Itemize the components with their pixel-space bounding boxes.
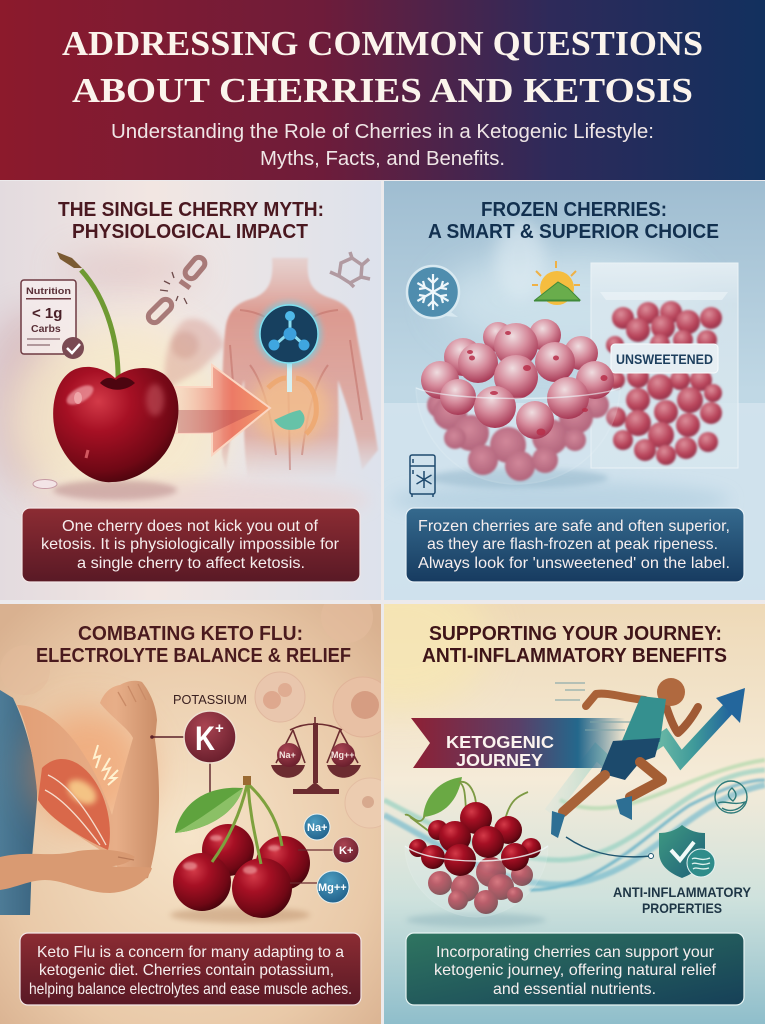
water droplet <box>33 480 57 488</box>
text box: a single cherry to affect ketosis. <box>77 555 305 572</box>
unsweetened label: UNSWEETENED <box>616 351 713 367</box>
icon: balance scale: Mg++ <box>331 750 355 760</box>
ketogenic journey banner: JOURNEY <box>456 750 543 770</box>
K+ badge: K <box>195 720 215 758</box>
arrow: cherry to body <box>175 365 270 455</box>
text box: ketogenic journey, offering natural relief <box>434 962 717 979</box>
icon: nutrition card: Carbs <box>31 323 61 335</box>
potassium callout <box>150 693 247 793</box>
title <box>62 24 703 110</box>
text box <box>406 933 744 1005</box>
text box: and essential nutrients. <box>493 981 656 998</box>
text box <box>406 508 744 582</box>
heading <box>422 623 727 667</box>
heading: ELECTROLYTE BALANCE & RELIEF <box>36 645 351 667</box>
subtitle <box>111 121 654 170</box>
top cherries <box>421 319 614 439</box>
icon: sun and mountain <box>532 261 580 305</box>
text box: ketosis. It is physiologically impossible for <box>41 536 340 553</box>
text box: Always look for 'unsweetened' on the label. <box>418 555 730 572</box>
text box: helping balance electrolytes and ease muscle aches. <box>29 981 352 998</box>
icon: snowflake badge <box>407 266 459 318</box>
Na+ ion: Na+ <box>307 822 328 834</box>
text box: Frozen cherries are safe and often superior, <box>418 518 730 535</box>
connector line <box>566 837 654 858</box>
icon: broken chain <box>146 255 207 325</box>
icon: balance scale: Na+ <box>279 750 296 760</box>
human body with muscles <box>222 258 378 480</box>
heading: THE SINGLE CHERRY MYTH: <box>58 199 324 221</box>
text box: as they are flash-frozen at peak ripeness. <box>427 536 718 553</box>
panel: frozen cherries <box>384 181 765 600</box>
panel: keto flu <box>0 591 395 1024</box>
heading <box>37 626 350 662</box>
anti-inflammatory label <box>613 884 752 916</box>
K+ ion: K+ <box>339 845 353 857</box>
leaf <box>175 788 243 833</box>
icon: nutrition card <box>21 280 84 359</box>
text box <box>22 508 360 582</box>
glowing muscle <box>38 759 110 850</box>
flowing waves <box>384 760 765 890</box>
K+ badge <box>184 711 236 763</box>
bag cherries <box>606 301 722 465</box>
title: ADDRESSING COMMON QUESTIONS <box>62 24 703 63</box>
heading: FROZEN CHERRIES: <box>481 199 667 221</box>
hand holding elbow <box>0 850 152 893</box>
subtitle: Understanding the Role of Cherries in a Ketogenic Lifestyle: <box>111 121 654 143</box>
subtitle: Myths, Facts, and Benefits. <box>260 148 505 170</box>
arrow: upward growth <box>550 688 745 813</box>
panel: supporting your journey <box>310 570 765 1024</box>
leaf <box>423 777 462 817</box>
icon: nutrition card: Nutrition <box>26 286 71 297</box>
header banner <box>0 0 765 180</box>
heading: SUPPORTING YOUR JOURNEY: <box>429 623 722 645</box>
ketogenic journey banner: KETOGENIC <box>446 732 554 752</box>
icon: shield <box>659 825 715 878</box>
heading: ANTI-INFLAMMATORY BENEFITS <box>422 645 727 667</box>
tank top <box>0 690 37 915</box>
bowl of fresh cherries <box>405 777 548 927</box>
panel: single cherry myth <box>0 181 381 600</box>
icon: freezer <box>410 455 435 497</box>
unsweetened label <box>611 344 718 373</box>
faint background body <box>164 319 225 390</box>
heading <box>428 202 718 238</box>
icon: balance scale <box>271 717 361 794</box>
large cherry <box>53 252 178 500</box>
motion lines <box>555 683 630 730</box>
icon: hexagon molecule <box>330 252 370 287</box>
heading: A SMART & SUPERIOR CHOICE <box>428 221 719 243</box>
heading <box>58 202 322 238</box>
background cells <box>0 591 395 828</box>
heading: COMBATING KETO FLU: <box>78 623 303 645</box>
icon: nutrition card: < 1g <box>32 305 62 322</box>
lower bowl cherries <box>428 857 533 914</box>
lower cherries inside bowl <box>427 392 609 481</box>
frozen cherry bag <box>591 263 738 468</box>
title: ABOUT CHERRIES AND KETOSIS <box>72 71 693 110</box>
potassium label: POTASSIUM <box>173 693 247 707</box>
running athlete <box>551 678 698 838</box>
text box: One cherry does not kick you out of <box>62 518 319 535</box>
text box: Keto Flu is a concern for many adapting to a <box>37 944 344 961</box>
cherry cluster <box>170 776 310 923</box>
anti-inflammatory label: ANTI-INFLAMMATORY <box>613 884 752 900</box>
text box <box>20 933 361 1005</box>
icon: hand with leaf <box>715 781 747 813</box>
person with sore arm <box>0 681 159 915</box>
text box: Incorporating cherries can support your <box>436 944 715 961</box>
ion badges <box>290 814 359 903</box>
glass bowl of frozen cherries <box>416 319 620 488</box>
heading: PHYSIOLOGICAL IMPACT <box>72 221 308 243</box>
pain bolts <box>94 745 118 785</box>
anti-inflammatory label: PROPERTIES <box>642 900 722 916</box>
cherry stems <box>405 782 528 838</box>
Mg++ ion: Mg++ <box>318 882 347 894</box>
arm <box>17 681 159 879</box>
text box: ketogenic diet. Cherries contain potassium, <box>39 962 334 979</box>
icon: check badge <box>62 337 84 359</box>
K+ badge: + <box>215 720 224 737</box>
ketogenic journey banner <box>411 718 625 770</box>
icon: molecule circle <box>256 301 322 367</box>
glowing metabolic ring <box>250 362 330 444</box>
